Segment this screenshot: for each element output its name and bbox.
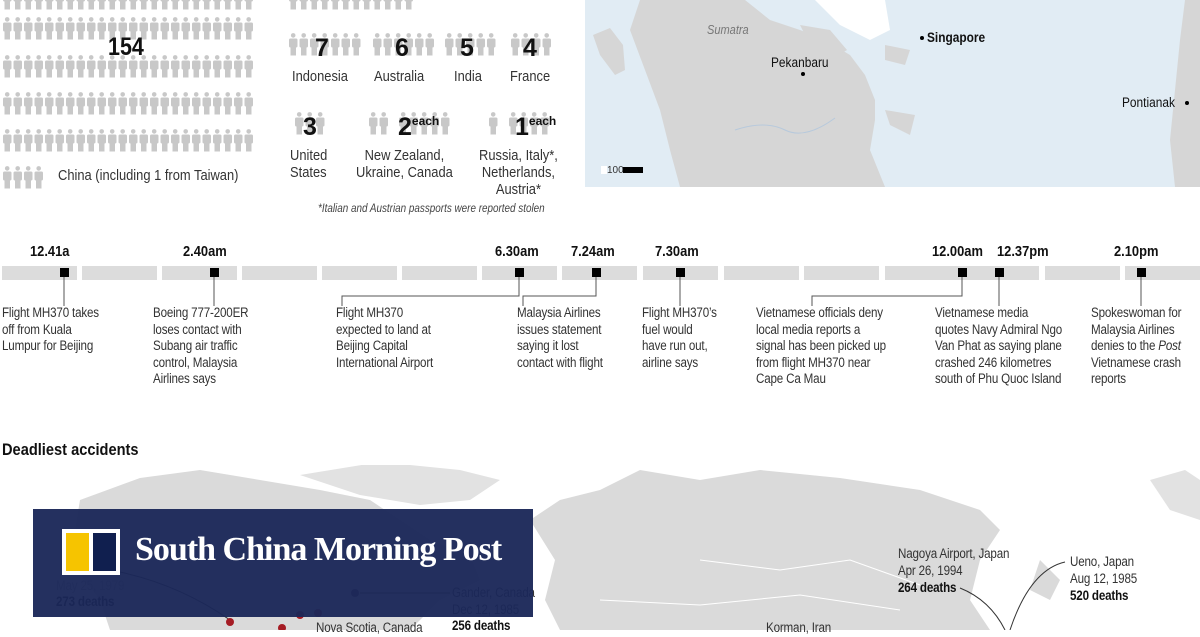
timeline: contact with flight [517, 354, 603, 370]
heading: Deadliest accidents: Deadliest accidents [2, 440, 139, 459]
event texts: off from Kuala [2, 322, 72, 336]
pictogram: other nationalities: Netherlands, [482, 164, 555, 181]
pictogram: other nationalities: Russia, Italy*, [479, 147, 558, 164]
accident labels: 273 deaths [56, 594, 114, 609]
timeline: Boeing 777-200ER [153, 305, 248, 320]
pictogram: other nationalities: 3 [303, 113, 317, 141]
timeline: Vietnamese crash [1091, 354, 1181, 370]
timeline: Van Phat as saying plane [935, 338, 1062, 353]
timeline: Malaysia Airlines [1091, 322, 1175, 336]
world map: Aug 12, 1985 [1070, 571, 1137, 586]
pictogram: other nationalities: 2each [398, 113, 439, 141]
timeline: airline says [642, 354, 698, 370]
accident labels: May 25, 1979 [56, 578, 124, 593]
pictogram: other nationalities: Austria* [496, 181, 541, 198]
timeline: saying it lost [517, 338, 578, 353]
timeline: reports [1091, 371, 1126, 386]
timeline: denies to the Post [1091, 338, 1181, 353]
number 154: 154 [108, 33, 144, 61]
pictogram: other nationalities: 7 [315, 34, 329, 62]
pictogram: other nationalities: 1each [515, 113, 556, 141]
pictogram: other nationalities: United [290, 147, 327, 164]
timeline: 7.30am [655, 243, 699, 260]
world map: 520 deaths [1070, 588, 1128, 603]
world map: Gander, Canada [452, 585, 535, 600]
logo: South China Morning Post [33, 509, 533, 617]
timeline: Beijing Capital [336, 338, 408, 353]
pictogram: other nationalities: India [454, 68, 482, 85]
timeline: local media reports a [756, 322, 860, 336]
timeline: 12.37pm [997, 243, 1049, 260]
timeline: 2.40am [183, 243, 227, 260]
pictogram: other nationalities: 6 [395, 34, 409, 62]
pictogram: other nationalities: Australia [374, 68, 424, 85]
timeline: fuel would [642, 322, 693, 336]
event texts: Flight MH370 takes [2, 305, 99, 320]
pictogram: other nationalities: States [290, 164, 327, 181]
label: Sumatra: Sumatra [707, 22, 749, 37]
pictogram: other nationalities: Ukraine, Canada [356, 164, 453, 181]
timeline: loses contact with [153, 322, 242, 336]
map: Sumatra region [585, 0, 1200, 187]
world map: Nova Scotia, Canada [316, 620, 422, 635]
pictogram: other nationalities: 4 [523, 34, 537, 62]
world map: 256 deaths [452, 618, 510, 633]
world map [56, 465, 1200, 635]
world map: Dec 12, 1985 [452, 602, 519, 616]
timeline: 12.00am [932, 243, 983, 260]
logo icon [62, 529, 120, 575]
timeline: issues statement [517, 322, 601, 336]
timeline: Cape Ca Mau [756, 371, 826, 386]
event texts [2, 305, 99, 353]
label: Singapore: Singapore [927, 29, 985, 45]
timeline: 7.24am [571, 243, 615, 260]
world map: 264 deaths [898, 580, 956, 595]
timeline: Flight MH370’s [642, 305, 717, 320]
timeline: 2.10pm [1114, 243, 1158, 260]
label China: China (including 1 from Taiwan) [58, 167, 238, 184]
timeline: Flight MH370 [336, 305, 403, 320]
timeline: Malaysia Airlines [517, 305, 601, 320]
accident labels [56, 578, 124, 609]
scale bar [601, 165, 643, 176]
timeline: crashed 246 kilometres [935, 354, 1051, 370]
timeline: International Airport [336, 354, 433, 370]
footnote: *Italian and Austrian passports were reported stolen [318, 203, 545, 215]
timeline: control, Malaysia [153, 354, 237, 370]
scale bar: 100 [607, 165, 624, 176]
timeline: expected to land at [336, 322, 431, 336]
pictogram: other nationalities: New Zealand, [365, 147, 444, 164]
world map: Korman, Iran [766, 620, 831, 635]
timeline [2, 243, 1200, 386]
pictogram: other nationalities: Indonesia [292, 68, 348, 85]
pictogram: other nationalities: France [510, 68, 550, 85]
pictogram: other nationalities: 5 [460, 34, 474, 62]
logo text: South China Morning Post [135, 531, 501, 568]
timeline: quotes Navy Admiral Ngo [935, 322, 1062, 336]
timeline: Vietnamese media [935, 305, 1028, 320]
timeline: Airlines says [153, 371, 216, 386]
timeline: Spokeswoman for [1091, 305, 1181, 320]
world map: Apr 26, 1994 [898, 563, 962, 578]
timeline: signal has been picked up [756, 338, 886, 353]
world map: Nagoya Airport, Japan [898, 546, 1009, 561]
timeline: 6.30am [495, 243, 539, 260]
timeline: 12.41a [30, 243, 69, 260]
timeline: have run out, [642, 338, 708, 353]
timeline: Subang air traffic [153, 338, 237, 353]
event texts: Lumpur for Beijing [2, 338, 93, 353]
timeline: Vietnamese officials deny [756, 305, 883, 320]
pictogram: other nationalities [289, 0, 558, 215]
timeline: from flight MH370 near [756, 354, 870, 370]
timeline: south of Phu Quoc Island [935, 371, 1061, 386]
label: Pekanbaru: Pekanbaru [771, 54, 829, 70]
world map: Ueno, Japan [1070, 554, 1134, 569]
pictogram: China passengers [3, 0, 253, 188]
label: Pontianak: Pontianak [1122, 94, 1175, 110]
